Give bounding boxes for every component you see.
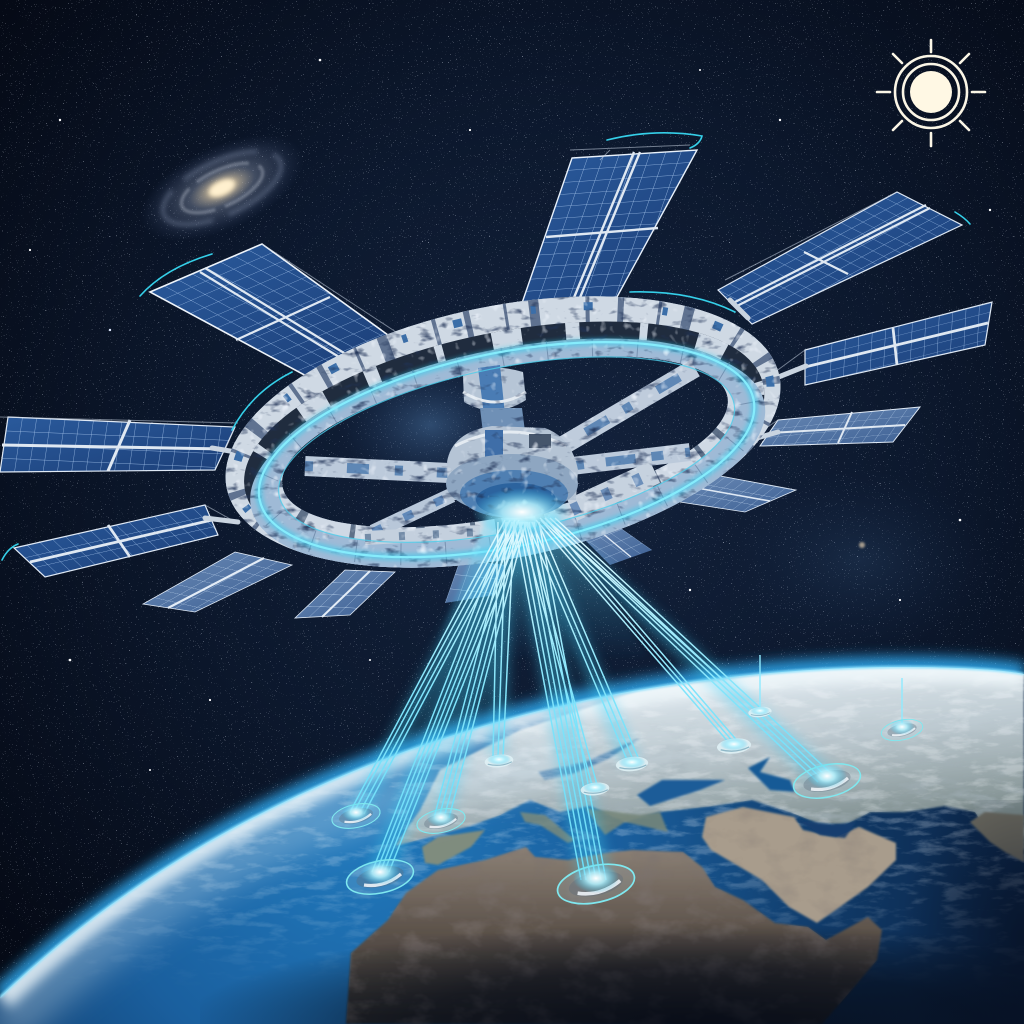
central hub bbox=[446, 365, 578, 518]
station: small west bbox=[330, 800, 382, 832]
spiral galaxy bbox=[124, 113, 320, 263]
station: north bbox=[484, 753, 514, 769]
panel: upper left bbox=[150, 244, 388, 378]
station: centre bbox=[580, 781, 610, 797]
lower disc bbox=[446, 454, 578, 518]
stalk bbox=[480, 408, 528, 458]
station: northeast bbox=[716, 737, 752, 755]
beam lines bbox=[350, 518, 834, 880]
panel: below right bbox=[580, 522, 652, 565]
icon: sun bbox=[877, 40, 985, 146]
sea: Baltic bbox=[538, 738, 640, 780]
panel: right bbox=[805, 302, 992, 385]
ring body bbox=[226, 296, 780, 568]
land: Italy bbox=[520, 812, 575, 843]
pale band bbox=[250, 344, 766, 568]
station: far east bbox=[879, 716, 925, 744]
station: large south bbox=[554, 858, 638, 910]
solar panels bbox=[0, 145, 992, 618]
atmosphere glow bbox=[0, 667, 1024, 997]
limb haze bbox=[0, 667, 1024, 997]
land: Balkans bbox=[585, 808, 668, 835]
panel struts bbox=[205, 300, 806, 522]
land texture: Arabia bbox=[742, 810, 860, 914]
panel: right small bbox=[760, 407, 920, 446]
cyan orbit arcs bbox=[2, 133, 970, 560]
land: Africa bbox=[346, 847, 882, 1024]
upper module bbox=[463, 365, 526, 415]
ring cyan light strip bbox=[240, 304, 773, 595]
land: Iberia bbox=[422, 830, 485, 865]
spoke: left bbox=[305, 466, 449, 473]
ground stations bbox=[330, 706, 925, 910]
spoke: bottom bbox=[365, 532, 480, 538]
inner wall bbox=[279, 384, 728, 538]
station: large east bbox=[790, 758, 864, 804]
energy beams bbox=[348, 515, 902, 880]
spoke: lower left bbox=[373, 495, 452, 532]
earth bbox=[0, 646, 1024, 1024]
beam glow bbox=[348, 518, 838, 880]
outer modules bbox=[226, 296, 780, 568]
spoke: upper right bbox=[552, 368, 695, 452]
land texture: Africa bbox=[346, 852, 876, 1024]
spoke: right bbox=[572, 452, 690, 466]
beam: vertical east bbox=[759, 655, 761, 708]
dark band bbox=[244, 322, 764, 538]
station: horizon bbox=[748, 706, 772, 718]
land: Eurasia bbox=[395, 664, 1024, 850]
earth surface bbox=[0, 667, 1024, 1024]
beam fan glow bbox=[430, 515, 650, 660]
beam: vertical far east bbox=[901, 678, 903, 726]
land texture: Eurasia bbox=[408, 748, 1024, 842]
panel: left lower small bbox=[143, 552, 292, 612]
panel: top bbox=[522, 150, 697, 303]
clouds bbox=[90, 675, 1024, 966]
sea: Persian Gulf bbox=[797, 820, 856, 838]
panel wire frames bbox=[0, 145, 897, 520]
station: north centre bbox=[615, 755, 649, 773]
station: small centre west bbox=[415, 805, 467, 837]
emitter bbox=[472, 488, 572, 536]
panel: lower right bbox=[680, 475, 796, 512]
panel: below centre bbox=[445, 560, 505, 603]
panel: far left bbox=[0, 417, 235, 472]
panel: left lower bbox=[14, 505, 218, 577]
sea: Black Sea bbox=[637, 780, 725, 806]
land: India bbox=[970, 812, 1024, 862]
station: large west bbox=[343, 854, 417, 900]
ring station bbox=[226, 296, 780, 568]
station body with surface texture bbox=[226, 296, 780, 568]
atmosphere edge bbox=[0, 667, 1024, 997]
night shade bbox=[206, 928, 1024, 1024]
panel: upper right bbox=[718, 192, 962, 324]
spokes bbox=[305, 368, 695, 538]
sea: Caspian bbox=[748, 757, 795, 792]
spoke: lower right bbox=[572, 472, 655, 510]
main body bbox=[447, 426, 578, 500]
land: Arabia bbox=[702, 807, 896, 923]
panel: bottom left bbox=[295, 570, 395, 618]
